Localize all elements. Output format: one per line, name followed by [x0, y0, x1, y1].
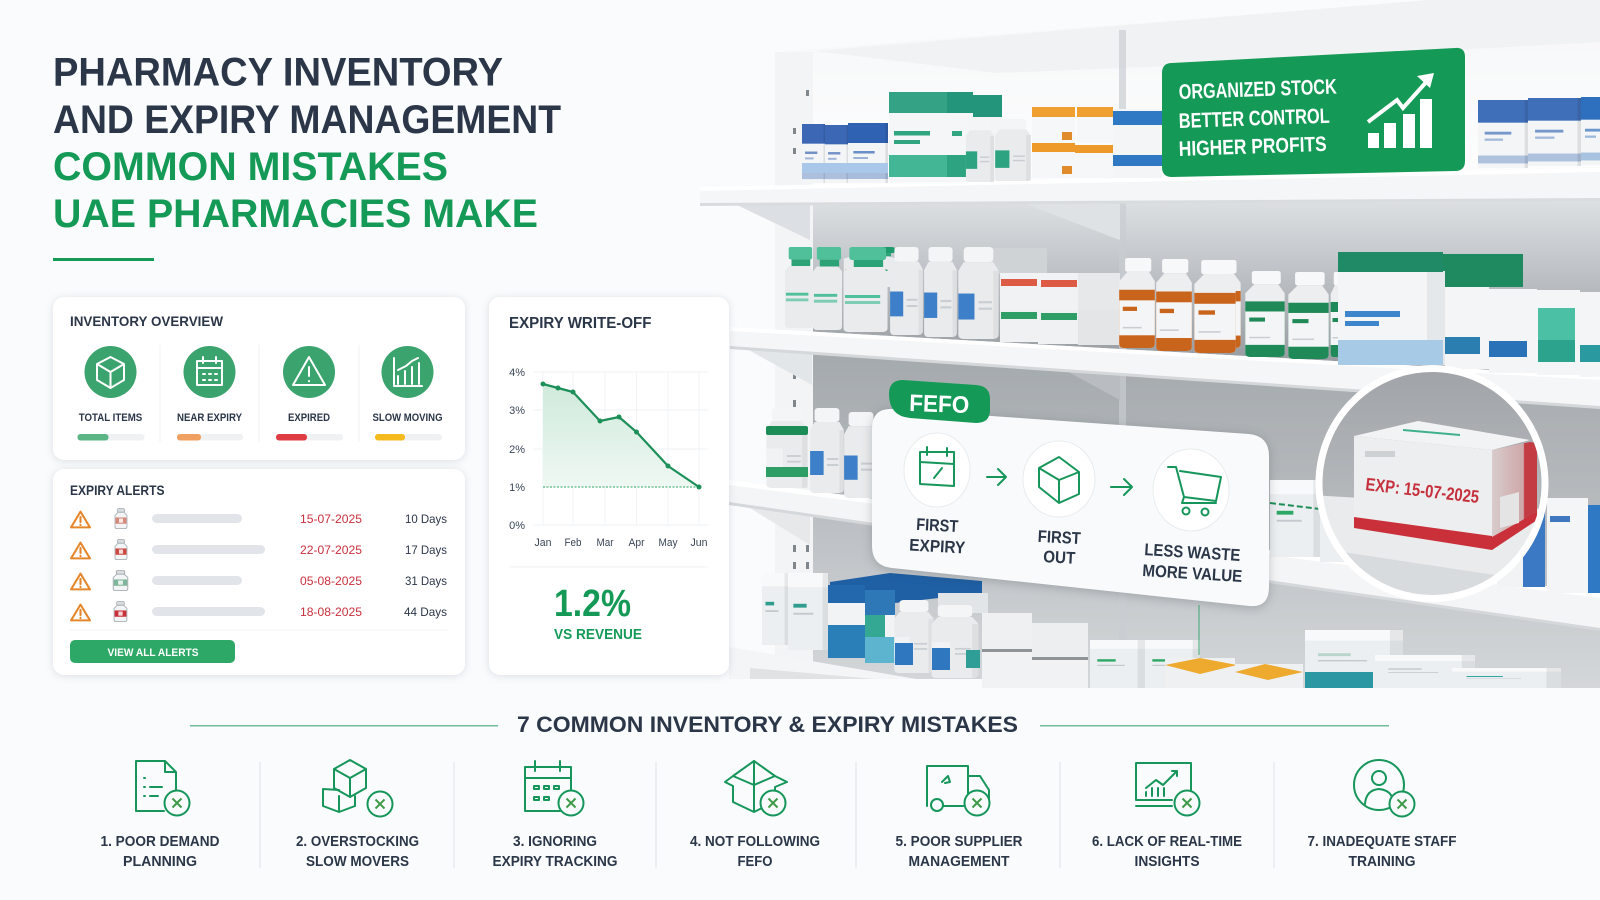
title: AND EXPIRY MANAGEMENT	[53, 98, 561, 142]
mistake 6	[1092, 763, 1242, 870]
heading: EXPIRY WRITE-OFF	[509, 315, 652, 332]
metric: expired	[276, 346, 343, 440]
FEFO tag	[889, 380, 990, 423]
line chart: 0%	[509, 520, 525, 532]
metric: slow moving: SLOW MOVING	[372, 412, 442, 424]
icon: document	[136, 761, 190, 816]
step: less waste more value: LESS WASTE	[1144, 540, 1241, 565]
green sign: organized stock: BETTER CONTROL	[1178, 105, 1330, 133]
third shelf products	[766, 408, 1600, 593]
second shelf products	[785, 247, 1600, 377]
mistake 6: INSIGHTS	[1134, 854, 1200, 870]
line chart: 2%	[509, 444, 525, 456]
mistake 7: 7. INADEQUATE STAFF	[1308, 834, 1457, 850]
green sign: organized stock	[1162, 48, 1465, 177]
heading: INVENTORY OVERVIEW	[70, 313, 224, 329]
bottom shelf board	[750, 662, 916, 679]
alert row 3: 31 Days	[405, 574, 447, 588]
line chart: Jan	[534, 537, 552, 549]
title: PHARMACY INVENTORY	[53, 50, 503, 94]
magnifier: expiry date on box	[1310, 368, 1560, 610]
pharmacy shelf illustration	[700, 0, 1600, 695]
icon: growth chart	[1368, 73, 1434, 148]
mistake 1: PLANNING	[123, 854, 197, 870]
line chart: 4%	[509, 367, 525, 379]
metric: slow moving	[372, 346, 442, 440]
green sign: organized stock: ORGANIZED STOCK	[1178, 75, 1337, 104]
title: COMMON MISTAKES	[53, 145, 448, 189]
top shelf products	[802, 92, 1600, 183]
alert row 3: 05-08-2025	[300, 574, 362, 588]
mistake 4: 4. NOT FOLLOWING	[690, 834, 820, 850]
icon: delivery truck	[927, 766, 990, 816]
panel: expiry alerts	[53, 469, 465, 675]
button: view all alerts	[70, 640, 235, 663]
mistake 3: 3. IGNORING	[513, 834, 597, 850]
mistake 2	[296, 760, 419, 870]
alert row 2: 17 Days	[405, 543, 447, 557]
line chart: 1%	[509, 482, 525, 494]
FEFO process card	[872, 380, 1269, 606]
heading: EXPIRY ALERTS	[70, 482, 164, 498]
alert row 3	[71, 571, 447, 590]
icon: analytics screen	[1136, 763, 1200, 816]
magnifier: expiry date on box: EXP: 15-07-2025	[1365, 474, 1480, 507]
third shelf board	[729, 480, 1600, 631]
step: first out	[1023, 441, 1095, 568]
step: first expiry: EXPIRY	[909, 536, 966, 557]
alert row 4	[71, 602, 447, 621]
FEFO tag: FEFO	[909, 390, 970, 419]
alert row 1	[71, 509, 447, 528]
step: less waste more value	[1142, 449, 1243, 586]
icon: stacked boxes	[323, 760, 392, 816]
mistake 7: TRAINING	[1348, 854, 1416, 870]
title: UAE PHARMACIES MAKE	[53, 192, 538, 236]
metric: total items: TOTAL ITEMS	[79, 412, 142, 424]
mistake 5: MANAGEMENT	[908, 854, 1010, 870]
icon: calendar	[525, 761, 584, 816]
mistake 5	[896, 766, 1023, 870]
green sign: organized stock: HIGHER PROFITS	[1178, 133, 1327, 161]
mistake 1	[100, 761, 220, 870]
metric: expired: EXPIRED	[288, 412, 330, 424]
mistake 5: 5. POOR SUPPLIER	[896, 834, 1023, 850]
section heading: 7 common mistakes: 7 COMMON INVENTORY & EXPIRY MISTAKES	[517, 712, 1018, 737]
bottom shelf products	[762, 573, 1561, 688]
icon: staff person	[1354, 760, 1414, 816]
alert row 1: 15-07-2025	[300, 512, 362, 526]
line chart	[509, 367, 708, 549]
metric: total items	[78, 346, 144, 440]
mistake 3	[492, 761, 618, 870]
metric: near expiry	[177, 346, 243, 440]
mistake 2: 2. OVERSTOCKING	[296, 834, 419, 850]
mistake 3: EXPIRY TRACKING	[492, 854, 618, 870]
step: first out: FIRST	[1037, 527, 1082, 548]
alert row 2: 22-07-2025	[300, 543, 362, 557]
mistake 2: SLOW MOVERS	[306, 854, 409, 870]
line chart: May	[658, 537, 678, 549]
panel: expiry write-off	[489, 297, 729, 675]
line chart: 3%	[509, 405, 525, 417]
step: first expiry: FIRST	[916, 515, 959, 536]
arrow	[1111, 479, 1132, 495]
arrow	[987, 469, 1006, 485]
step: less waste more value: MORE VALUE	[1142, 561, 1243, 586]
top shelf board	[700, 178, 1600, 206]
line chart: Apr	[628, 537, 645, 549]
mistake 6: 6. LACK OF REAL-TIME	[1092, 834, 1242, 850]
stat: 1.2% vs revenue: 1.2%	[554, 583, 631, 625]
step: first out: OUT	[1043, 547, 1076, 568]
second shelf board	[730, 327, 1600, 409]
panel: inventory overview	[53, 297, 465, 460]
alert row 2	[71, 540, 447, 559]
line chart: Jun	[690, 537, 708, 549]
title	[53, 50, 561, 236]
mistake 4: FEFO	[738, 854, 772, 870]
alert row 4: 44 Days	[404, 605, 447, 619]
line chart: Mar	[596, 537, 614, 549]
alert row 1: 10 Days	[405, 512, 447, 526]
line chart: Feb	[564, 537, 582, 549]
alert row 4: 18-08-2025	[300, 605, 362, 619]
mistake 1: 1. POOR DEMAND	[100, 834, 220, 850]
stat: 1.2% vs revenue	[554, 583, 642, 643]
mistake 7	[1308, 760, 1457, 870]
mistake 4	[690, 761, 820, 870]
step: first expiry	[904, 433, 970, 557]
stat: 1.2% vs revenue: VS REVENUE	[554, 626, 642, 643]
button: view all alerts: VIEW ALL ALERTS	[108, 647, 198, 659]
metric: near expiry: NEAR EXPIRY	[177, 412, 243, 424]
icon: open box	[725, 761, 787, 816]
